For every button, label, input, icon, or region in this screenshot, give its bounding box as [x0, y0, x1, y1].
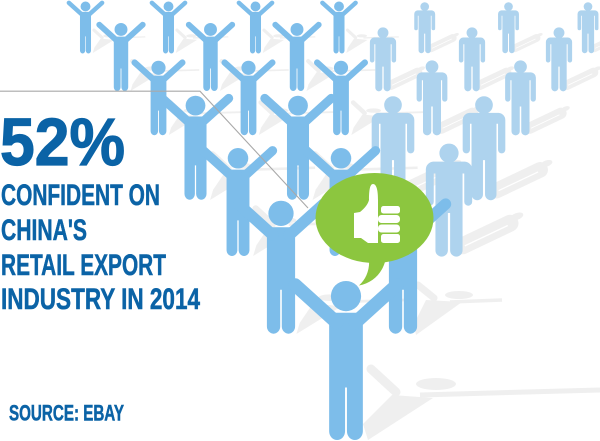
icon: thumbs up — [354, 184, 400, 243]
speech bubble — [316, 173, 434, 286]
description text: CONFIDENT ON — [1, 179, 160, 212]
description text: CHINA'S — [1, 214, 87, 247]
description text — [1, 179, 200, 316]
shadow of right raised figure — [414, 285, 502, 335]
shadow of front figure — [363, 369, 600, 440]
headline figure: 52% — [0, 105, 125, 180]
source: SOURCE: EBAY — [9, 400, 124, 426]
blue figures: arms raised — [69, 2, 446, 440]
pale figures: not confident — [370, 2, 598, 257]
callout leader line — [0, 91, 308, 208]
ground shadows of crowd — [93, 30, 600, 334]
description text: RETAIL EXPORT — [1, 249, 166, 282]
description text: INDUSTRY IN 2014 — [1, 283, 200, 316]
